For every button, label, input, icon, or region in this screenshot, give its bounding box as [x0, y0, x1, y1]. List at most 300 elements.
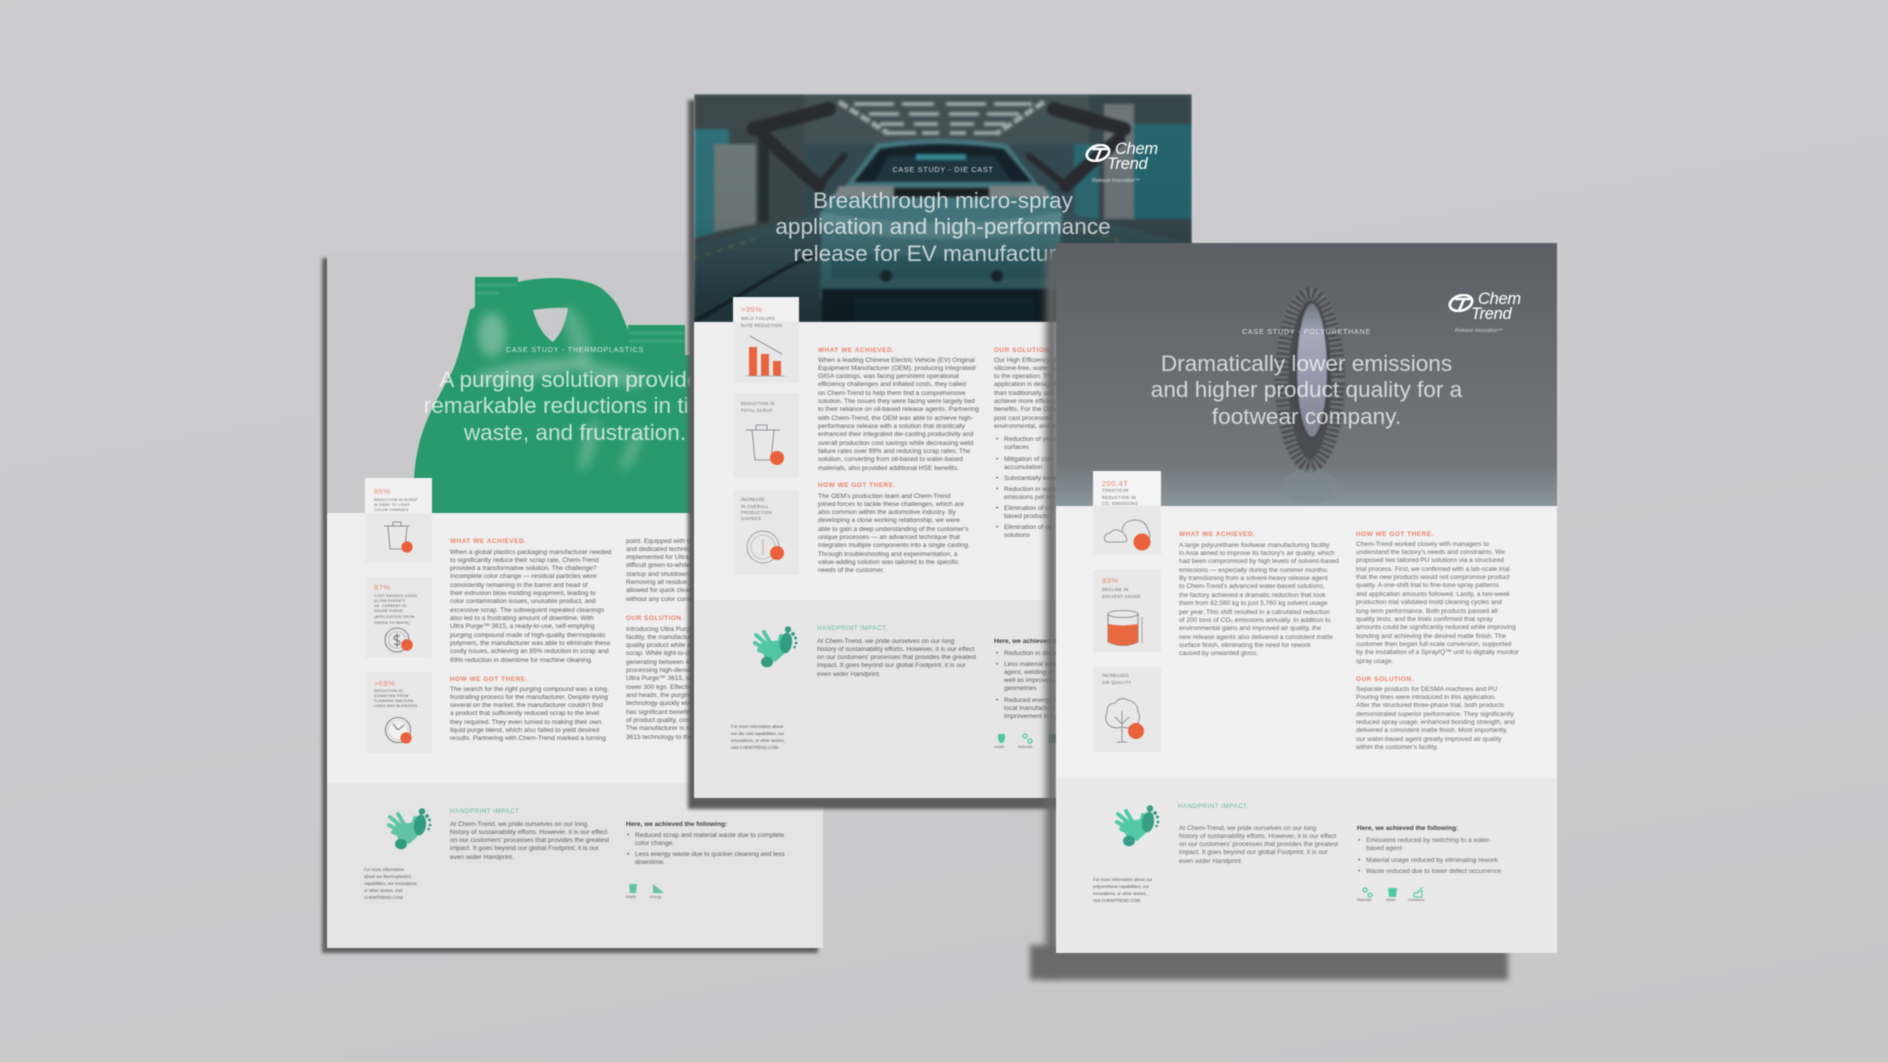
- stat 87%: 87%: [374, 583, 391, 592]
- body: what we achieved: on Chem-Trend to help them find a comprehensive: [818, 390, 966, 397]
- body: our solution: environmental, and safety: [994, 423, 1069, 430]
- stat label: IN DARK TO LIGHT: [374, 503, 410, 507]
- body: our solution: The manufacturer is now using: [626, 725, 716, 732]
- bullet: Reduction in die and tooling: [1004, 650, 1085, 656]
- stat label: RATE REDUCTION: [741, 323, 782, 328]
- body: what we achieved: [1179, 542, 1339, 659]
- bullets: solution: •: [996, 436, 998, 442]
- bullet: Substantially lower: [1004, 474, 1059, 482]
- title: Breakthrough micro-spray: [813, 188, 1073, 213]
- stat label: PRODUCTION: [741, 510, 772, 515]
- body: what we achieved: excessive scrap. The subsequent repeated cleanings: [450, 607, 604, 614]
- body: what we achieved: new release agents also delivered a consistent matte: [1179, 634, 1333, 641]
- body: how we got there: The search for the right purging compound was a long,: [450, 686, 609, 692]
- icon: trash: [746, 424, 785, 466]
- note: more information: visit CHEMTREND.COM: [1093, 898, 1140, 903]
- body: how we got there: unique processes — an advanced technique that: [818, 534, 960, 541]
- heading: what we achieved: WHAT WE ACHIEVED.: [818, 347, 894, 354]
- stat label: SAVINGS: [741, 516, 761, 521]
- logo: Chem Trend: Trend: [1471, 305, 1511, 323]
- body: what we achieved: materials, also provided additional HSE benefits.: [818, 465, 959, 472]
- heading: achieved list: Here, we achieved the following:: [1357, 824, 1458, 832]
- stat label: ULTRA PURGE™: [374, 599, 406, 603]
- stat label: [1102, 587, 1141, 600]
- body: continued column: implemented for Ultra Purge in the: [626, 554, 726, 561]
- body: what we achieved: the factory achieved a dramatic reduction that took: [1179, 592, 1326, 599]
- body: our solution: and heads, the purging compound: [626, 692, 725, 699]
- body: how we got there: quality tests, and the trials confirmed that spray: [1356, 616, 1493, 623]
- bullet: Reduction in volatile: [1004, 486, 1063, 492]
- stat label: WELD FAILURE: [741, 316, 775, 321]
- body: what we achieved: Incomplete color change — residual particles were: [450, 573, 597, 580]
- page: die cast case study: [694, 94, 1192, 798]
- body: our solution: to the operation. The: [994, 373, 1054, 380]
- icon: clock: [384, 716, 412, 744]
- heading: how we got there: HOW WE GOT THERE.: [818, 482, 896, 489]
- body: our solution: application is designed: [994, 381, 1060, 388]
- heading: our solution: OUR SOLUTION.: [994, 347, 1052, 354]
- body: what we achieved: By transitioning from a solvent-heavy release agent: [1179, 575, 1328, 582]
- stat label: REDUCTION IN: [1102, 495, 1136, 500]
- body: what we achieved: [450, 548, 612, 664]
- body: how we got there: by the installation of a SprayIQ™ unit to digitally monitor: [1356, 649, 1519, 656]
- body: handprint impact: history of sustainability efforts. However, it is our effect: [1179, 833, 1336, 840]
- body: our solution: has significant benefits in terms: [626, 709, 717, 716]
- bullet: Elimination of oil: [1004, 524, 1052, 530]
- page: thermoplastics case study: [327, 255, 823, 948]
- title: application and high-performance: [775, 214, 1111, 239]
- body: how we got there: that the new products would not compromise product: [1356, 574, 1510, 581]
- body: our solution: processing high-density polymers,: [626, 667, 725, 674]
- stat label: TOTAL SCRAP: [741, 408, 773, 413]
- note: more information: For more information: [364, 867, 404, 872]
- title: release for EV manufacturing.: [794, 241, 1092, 266]
- bullet: [996, 456, 1053, 471]
- body: how we got there: production trial validated mold cleaning cycles and: [1356, 599, 1502, 606]
- body: how we got there: long-term performance. Both products passed all: [1356, 608, 1498, 614]
- body: what we achieved: performance release with a solution that drastically: [818, 423, 965, 430]
- stat card: air quality: [1093, 667, 1161, 752]
- stat card: scrap: [733, 393, 799, 478]
- bullet: [996, 696, 1080, 721]
- heading: our solution: OUR SOLUTION.: [1356, 676, 1414, 683]
- body: our solution: than traditionally and: [994, 390, 1054, 397]
- note: more information: [730, 724, 785, 750]
- bullet: •: [996, 504, 998, 512]
- note: more information: For more information about: [731, 724, 783, 729]
- body: how we got there: The OEM's production team and Chem-Trend: [818, 492, 950, 500]
- body: how we got there: amounts could be significantly reduced while improving: [1356, 624, 1516, 631]
- stat card: savings: [733, 490, 799, 575]
- case study label: CASE STUDY - POLYURETHANE: [1242, 327, 1371, 336]
- heading: handprint impact: HANDPRINT IMPACT.: [1178, 803, 1249, 810]
- body: our solution: Ultra Purge™ 3615, scrap was: [626, 675, 715, 682]
- stat label: [740, 401, 775, 413]
- body: our solution: facility, the manufacturer made: [626, 634, 715, 641]
- body: how we got there: understand the factory's needs and constraints. We: [1356, 549, 1505, 556]
- body: what we achieved: caused by unwanted gloss.: [1179, 650, 1258, 657]
- title: and higher product quality for a: [1151, 377, 1462, 402]
- body: what we achieved: [818, 356, 980, 472]
- body: how we got there: spray usage.: [1356, 658, 1394, 665]
- body: what we achieved: surface finish, eliminating the need for rework: [1179, 642, 1311, 649]
- icon: hand and foot: [1115, 805, 1161, 848]
- body: what we achieved: overall production cost savings while decreasing weld: [818, 440, 973, 447]
- body: handprint impact: At Chem-Trend, we pride ourselves on our long: [450, 820, 587, 828]
- title: [1056, 351, 1557, 430]
- bullet: Less material waste from: [1004, 660, 1077, 668]
- title: [775, 188, 1111, 266]
- body: handprint impact: on our customers' processes that provides the greatest: [450, 837, 609, 844]
- body: handprint impact: on our customers' processes that provides the greatest: [1179, 841, 1338, 848]
- body: what we achieved: environmental gains and improved air quality, the: [1179, 625, 1321, 632]
- body: how we got there: needs of the customer.: [818, 567, 884, 574]
- logo: Chem Trend: Release Innovation™: [1092, 178, 1140, 184]
- stat label: INCREASED: [1102, 673, 1129, 678]
- body: what we achieved: to Chem-Trend's advanced water-based solutions,: [1179, 583, 1325, 590]
- body: continued column: difficult green-to-white change,: [626, 562, 715, 569]
- body: handprint impact: At Chem-Trend, we pride ourselves on our long: [1179, 824, 1316, 832]
- body: our solution: Our High Efficiency Release,: [994, 356, 1078, 364]
- stat label: VS. CURRENT IN-: [374, 604, 408, 608]
- bullet: based agent: [1366, 845, 1402, 852]
- body: how we got there: Chem-Trend worked closely with managers to: [1356, 540, 1489, 548]
- bullet: solutions: [1004, 532, 1030, 539]
- body: what we achieved: efficiency challenges and inflated costs, they called: [818, 381, 966, 388]
- body: what we achieved: per year. This shift resulted in a calculated reduction: [1179, 608, 1330, 616]
- bullet: •: [996, 456, 998, 462]
- note: more information: innovations, or other stories,: [731, 738, 785, 743]
- body: what we achieved: enhanced their integrated die-casting productivity and: [818, 431, 973, 438]
- body: how we got there: frustrating process for the manufacturer. Despite trying: [450, 694, 608, 701]
- stat card: 69%: [365, 672, 432, 753]
- body: what we achieved: solution, converting from oil-based to water-based: [818, 456, 963, 463]
- body: how we got there: liquid purge blend, which also failed to yield desired: [450, 727, 599, 734]
- stat label: [740, 316, 782, 328]
- bullet: local manufacturing and: [1004, 705, 1074, 712]
- body: our solution: Introducing Ultra Purge to the: [626, 626, 712, 632]
- icon: waste: [628, 883, 664, 894]
- hero image: EV car in factory: [693, 93, 1193, 323]
- body: how we got there: quality. A one-shift trial to fine-tune spray patterns: [1356, 582, 1499, 589]
- body: continued column: [626, 538, 728, 603]
- bullet: [1358, 836, 1492, 853]
- icon: cloud: [1102, 517, 1154, 551]
- logo: Chem Trend: [1448, 291, 1518, 337]
- note: more information: innovations, or other stories,: [1093, 891, 1147, 896]
- body: handprint impact: even wider Handprint.: [817, 671, 881, 678]
- body: how we got there: and application amounts followed. Lastly, a two-week: [1356, 591, 1510, 598]
- bullet: agent, welding defects, as: [1004, 669, 1080, 676]
- body: our solution: generating between 400 and 600: [626, 659, 722, 666]
- bullet: accumulation: [1004, 464, 1043, 471]
- stat label: INCREASE: [741, 497, 765, 502]
- bullet list: color change.: [635, 840, 674, 847]
- stat label: COST SAVINGS USING: [374, 594, 417, 598]
- icons: health, materials: [997, 733, 1057, 744]
- bullet list: •: [627, 851, 629, 858]
- body: continued column: and dedicated technical support,: [626, 546, 720, 553]
- body: our solution: [626, 626, 726, 742]
- bullet: •: [1358, 868, 1360, 874]
- body: how we got there: results. Partnering with Chem-Trend marked a turning: [450, 735, 606, 742]
- body: continued column: Removing all residue, Chem-Trend: [626, 579, 727, 586]
- body: our solution: benefits. For the OEM,: [994, 406, 1060, 413]
- icon: hand and foot: [386, 808, 432, 850]
- body: our solution: technology quickly eliminated: [626, 700, 711, 707]
- footer band: handprint impact: [1056, 778, 1557, 953]
- body: what we achieved: When a leading Chinese Electric Vehicle (EV) Original: [818, 356, 975, 364]
- stat card: weld failure: [733, 297, 799, 383]
- bullet: •: [996, 660, 998, 668]
- body: our solution: scrap. While light-to-dark colors: [626, 650, 718, 657]
- body: how we got there: bonding and achieving the desired matte finish. The: [1356, 633, 1506, 640]
- bullet list: Less energy waste due to quicker cleaning and less: [635, 851, 785, 858]
- body: our solution: within the customer's facility.: [1356, 744, 1438, 751]
- stat label: REDUCTION IN: [741, 401, 775, 406]
- heading: what we achieved: WHAT WE ACHIEVED.: [1179, 531, 1255, 538]
- icons: materials, waste, emissions: [1362, 887, 1424, 898]
- note: more information: or other stories, visit: [364, 888, 402, 893]
- bullets: solution: [996, 436, 1061, 451]
- bullet: Material usage reduced by eliminating rework: [1366, 856, 1498, 864]
- body: what we achieved: purging compound made of high-quality thermoplastic: [450, 632, 606, 639]
- shadow: left page: [322, 258, 818, 953]
- body: handprint impact: history of sustainability efforts. However, it is our effect: [450, 829, 607, 836]
- stat label: CO₂ EMISSIONS: [1102, 501, 1138, 506]
- bullet: •: [1358, 836, 1360, 844]
- bullet list: •: [627, 832, 629, 838]
- note: more information: For more information about our: [1093, 877, 1152, 882]
- bullet list: Reduced scrap and material waste due to complete: [635, 832, 784, 838]
- stat 69%: >69%: [374, 679, 395, 688]
- heading: achieved list: Here, we achieved the following:: [626, 820, 727, 828]
- bullets: solution: surfaces: [1004, 444, 1029, 451]
- footer band: handprint impact: [327, 783, 823, 948]
- body: what we achieved: their extrusion blow molding equipment, leading to: [450, 590, 596, 597]
- stat 200.4T: 200.4T: [1102, 479, 1128, 488]
- body: what we achieved: failure rates over 99% and reducing scrap rates. The: [818, 448, 970, 455]
- body: what we achieved: also led to a frustrating amount of downtime. With: [450, 615, 594, 622]
- stat >99%: >99%: [741, 305, 762, 314]
- body: what we achieved: color contamination issues, unusable product, and: [450, 598, 596, 605]
- stat label: GREEN TO WHITE): [374, 621, 410, 625]
- stat label: [374, 594, 418, 626]
- logo: Chem Trend: Trend: [1107, 155, 1147, 173]
- stat label: LINES AND BLENDERS: [374, 704, 418, 708]
- stat label: [374, 498, 418, 512]
- body: handprint impact: At Chem-Trend, we pride ourselves on our long: [817, 638, 954, 644]
- body: what we achieved: with Chem-Trend, the OEM was able to achieve high-: [818, 415, 973, 422]
- title: footwear company.: [1212, 404, 1401, 429]
- body: our solution: post cast processes,: [994, 415, 1054, 422]
- heading: how we got there: HOW WE GOT THERE.: [450, 676, 528, 683]
- stat label: [374, 689, 418, 708]
- body: what we achieved: provided a transformative solution. The challenge?: [450, 565, 597, 572]
- stat card: CO2: [1093, 471, 1161, 555]
- stat label: [1102, 488, 1138, 507]
- body: how we got there: trial process. First, we confirmed with a lab-scale trial: [1356, 566, 1510, 573]
- body: our solution: of product quality, cost and time.: [626, 717, 720, 724]
- stat label: AIR QUALITY: [1102, 680, 1131, 685]
- stat label: SOLVENT USAGE: [1102, 594, 1141, 599]
- body: our solution: Separate products for DESMA machines and PU: [1356, 686, 1497, 692]
- body: continued column: without any color contamination.: [626, 596, 720, 603]
- icon label: energy: Energy: [650, 895, 661, 899]
- icon label: materials: Materials: [1018, 745, 1033, 749]
- stat card: 85%: [365, 478, 432, 563]
- body: how we got there: [450, 686, 609, 742]
- body: what we achieved: solution. The issues they were facing were largely tied: [818, 398, 975, 405]
- bullet: Emissions reduced by switching to a water-: [1366, 836, 1492, 844]
- body: handprint impact: [1179, 824, 1338, 866]
- shadow: polyurethane page bottom: [1030, 945, 1508, 980]
- bullet: •: [996, 474, 998, 482]
- bar chart icon: [744, 335, 786, 377]
- icon label: materials: Materials: [1357, 898, 1372, 902]
- note: more information: CHEMTREND.COM: [364, 895, 403, 900]
- body: what we achieved: consistently remaining in the barrel and head of: [450, 582, 588, 589]
- body: how we got there: several on the market, the manufacturer couldn't find: [450, 702, 603, 709]
- bullet list: [626, 832, 786, 866]
- bullet: based products: [1004, 513, 1049, 520]
- shadow: polyurethane page: [1046, 250, 1058, 975]
- bullet: improvement in cycle time: [1004, 713, 1080, 720]
- icon label: waste: Waste: [626, 895, 636, 899]
- title: waste, and frustration.: [464, 420, 686, 445]
- icon: trash: [384, 521, 414, 554]
- icon label: health: Health: [994, 745, 1004, 749]
- heading: handprint impact: HANDPRINT IMPACT: [450, 808, 519, 815]
- stat 85%: 85%: [374, 487, 391, 496]
- note: more information: polyurethane capabilities, our: [1093, 884, 1149, 889]
- icon label: waste: Waste: [1386, 898, 1396, 902]
- note: more information: about our thermoplastics: [364, 874, 411, 879]
- bullet: •: [996, 696, 998, 704]
- body: how we got there: [1356, 540, 1519, 666]
- body: continued column: allowed for quick cleaning: [626, 587, 701, 594]
- body: what we achieved: GIGA castings, was facing persistent operational: [818, 373, 959, 380]
- body: our solution: lower 300 kgs. Effective on barrels: [626, 684, 726, 691]
- body: our solution: quality product while also cutting: [626, 642, 720, 649]
- stat label: COLOR CHANGES: [374, 508, 409, 512]
- stat label: REDUCTION IN SCRAP: [374, 498, 418, 502]
- stat label: TONS/YEAR: [1102, 488, 1129, 493]
- title: [424, 367, 726, 445]
- body: our solution: reduced spray usage, enhanced bonding strength, and: [1356, 719, 1515, 726]
- icon: cylinder: [1106, 609, 1146, 649]
- stat label: HOUSE PURGE: [374, 609, 403, 613]
- icon: coin: [746, 530, 785, 564]
- body: what we achieved: costly issues, achieving an 85% reduction in scrap and: [450, 648, 609, 655]
- body: handprint impact: [450, 820, 610, 861]
- stat card: solvent: [1093, 570, 1161, 652]
- note: more information: capabilities, our innovations,: [364, 881, 418, 886]
- heading: handprint impact: HANDPRINT IMPACT.: [817, 625, 888, 632]
- bullet: [996, 524, 1052, 539]
- stat label: DOWNTIME FROM: [374, 694, 409, 698]
- bullet: [996, 486, 1063, 501]
- page: polyurethane case study: [1056, 243, 1557, 953]
- logo: Chem Trend: [1084, 140, 1158, 184]
- note: more information: [364, 867, 418, 900]
- body: how we got there: value-adding solution was tailored to the specific: [818, 559, 958, 566]
- logo: Chem Trend: Release Innovation™: [1455, 328, 1503, 334]
- body: how we got there: integrates multiple components into a single casting.: [818, 542, 970, 549]
- note: more information: our die cast capabilities, our: [731, 731, 784, 736]
- body: how we got there: joined forces to tackle these challenges, which are: [818, 501, 964, 508]
- body: continued column: point. Equipped with Chem-Trend's: [626, 538, 728, 544]
- body: how we got there: developing a close working relationship, we were: [818, 517, 960, 524]
- body: how we got there: customer then began full-scale conversion, supported: [1356, 641, 1511, 648]
- body: continued column: startup and shutdown. Effective: [626, 571, 717, 578]
- note: more information: visit CHEMTREND.COM: [731, 745, 778, 750]
- bullet: well as improved casting: [1004, 677, 1075, 684]
- stat label: REDUCTION IN: [374, 689, 403, 693]
- logo: Chem Trend: Chem: [1478, 290, 1521, 308]
- icon label: emissions: Emissions: [1408, 898, 1424, 902]
- body: our solution: Pouring lines were introduced in this application.: [1356, 694, 1496, 701]
- body: handprint impact: history of sustainability efforts. However, it is our effect: [817, 646, 974, 653]
- body: handprint impact: even wider Handprint.: [1179, 858, 1243, 865]
- body: what we achieved: polymers, the manufacturer was able to eliminate these: [450, 640, 610, 647]
- body: how we got there: proposed two tailored PU solutions via a structured: [1356, 557, 1504, 564]
- logo: Chem Trend: Chem: [1115, 140, 1158, 158]
- title: Dramatically lower emissions: [1161, 351, 1452, 376]
- body: our solution: [994, 356, 1078, 430]
- footer band: handprint impact: [694, 600, 1192, 798]
- body: handprint impact: impact. It goes beyond our global Footprint; it is our: [1179, 849, 1328, 856]
- case study label: CASE STUDY - DIE CAST: [892, 165, 994, 174]
- body: how we got there: they required. They even turned to making their own: [450, 719, 601, 726]
- body: what we achieved: of 200 tons of CO₂ emissions annually. In addition to: [1179, 617, 1331, 624]
- body: what we achieved: to their reliance on oil-based release agents. Partnering: [818, 406, 979, 413]
- heading: how we got there: HOW WE GOT THERE.: [1356, 531, 1434, 538]
- bullet: emissions per ton: [1004, 494, 1055, 501]
- body: what we achieved: had been compromised by high levels of solvent-based: [1179, 558, 1339, 565]
- body: how we got there: Through troubleshooting and experimentation, a: [818, 551, 957, 558]
- body: what we achieved: A large polyurethane footwear manufacturing facility: [1179, 542, 1329, 548]
- body: our solution: achieve more efficiency: [994, 398, 1062, 405]
- body: what we achieved: to significantly reduce their scrap rate, Chem-Trend: [450, 557, 599, 564]
- bullet: [996, 504, 1067, 520]
- body: our solution: [1356, 686, 1515, 752]
- body: how we got there: a product that sufficiently reduced scrap to the level: [450, 710, 599, 717]
- icon: coin: [384, 627, 414, 653]
- body: how we got there: also common within the automotive industry. By: [818, 509, 956, 516]
- hero image: green bottles: [326, 254, 691, 514]
- body: our solution: 3615 technology to their full line.: [626, 734, 720, 741]
- body: what we achieved: When a global plastics packaging manufacturer needed: [450, 548, 611, 556]
- stat label: DECLINE IN: [1102, 587, 1128, 592]
- heading: our solution: OUR SOLUTION.: [626, 615, 684, 622]
- title: remarkable reductions in time,: [424, 393, 726, 418]
- bullet: •: [1358, 856, 1360, 864]
- bullet: •: [996, 650, 998, 656]
- bullet: [996, 660, 1080, 692]
- bullet list: downtime.: [635, 859, 665, 866]
- icon: hand and foot: [752, 626, 798, 668]
- stat label: (APPLICATION FROM: [374, 615, 414, 619]
- body: how we got there: able to gain a deep understanding of the customer's: [818, 526, 968, 533]
- bullet: Mitigation of cold: [1004, 456, 1053, 462]
- bullet: geometries: [1004, 685, 1036, 692]
- stat label: [740, 497, 772, 521]
- body: our solution: our water-based agent greatly improved air quality: [1356, 736, 1502, 743]
- stat label: [1102, 673, 1131, 686]
- heading: achieved list: Here, we achieved the following:: [994, 638, 1095, 644]
- bullets: solution: Reduction of yellow: [1004, 436, 1061, 442]
